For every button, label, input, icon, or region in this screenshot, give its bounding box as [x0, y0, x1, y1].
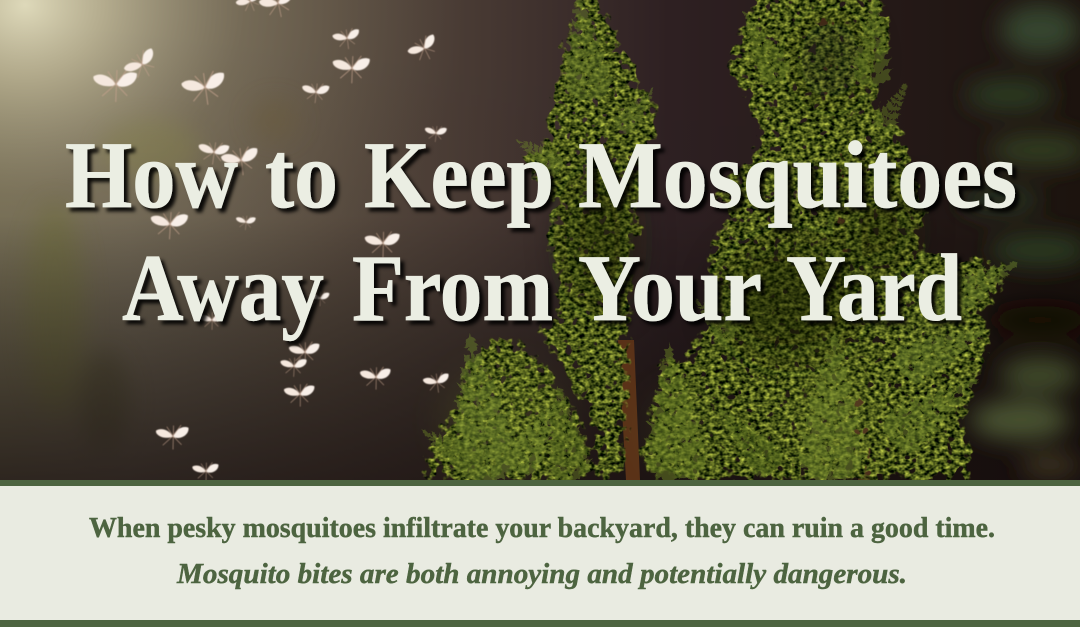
italic sentence: Mosquito bites are both annoying and potentially dangerous. — [176, 558, 907, 590]
title: Yard — [786, 235, 962, 341]
blurred pine on the right — [960, 4, 1080, 477]
title: to — [265, 122, 338, 228]
top green rule — [0, 480, 1080, 486]
centre sprig fronds — [629, 340, 718, 491]
title: Your — [578, 235, 762, 341]
title: Mosquitoes — [578, 122, 1017, 228]
intro sentence: When pesky mosquitoes infiltrate your backyard, they can ruin a good time. — [89, 512, 995, 544]
foliage highlights — [445, 296, 980, 470]
lower shade — [0, 0, 1080, 482]
dark forest backdrop — [0, 0, 1080, 482]
right tree foliage mass — [650, 0, 1015, 480]
centre sprig foliage — [640, 340, 725, 480]
intro panel — [0, 480, 1080, 627]
sunlight glow — [0, 0, 540, 420]
foliage shadows — [566, 20, 914, 360]
bottom green rule — [0, 620, 1080, 627]
left tree foliage mass — [405, 0, 665, 480]
mosquitoes swarm — [92, 0, 450, 482]
trunks — [618, 0, 872, 480]
title — [65, 122, 1017, 341]
right tree fronds — [684, 0, 1033, 490]
title: How — [65, 122, 238, 228]
title: Away — [122, 235, 324, 341]
left tree fronds — [409, 0, 666, 495]
title: Keep — [364, 122, 554, 228]
background photo: forest and tree — [0, 0, 1080, 495]
mossy bokeh — [25, 100, 299, 450]
title: From — [352, 235, 553, 341]
panel background — [0, 480, 1080, 627]
left lower branch foliage — [415, 325, 595, 480]
